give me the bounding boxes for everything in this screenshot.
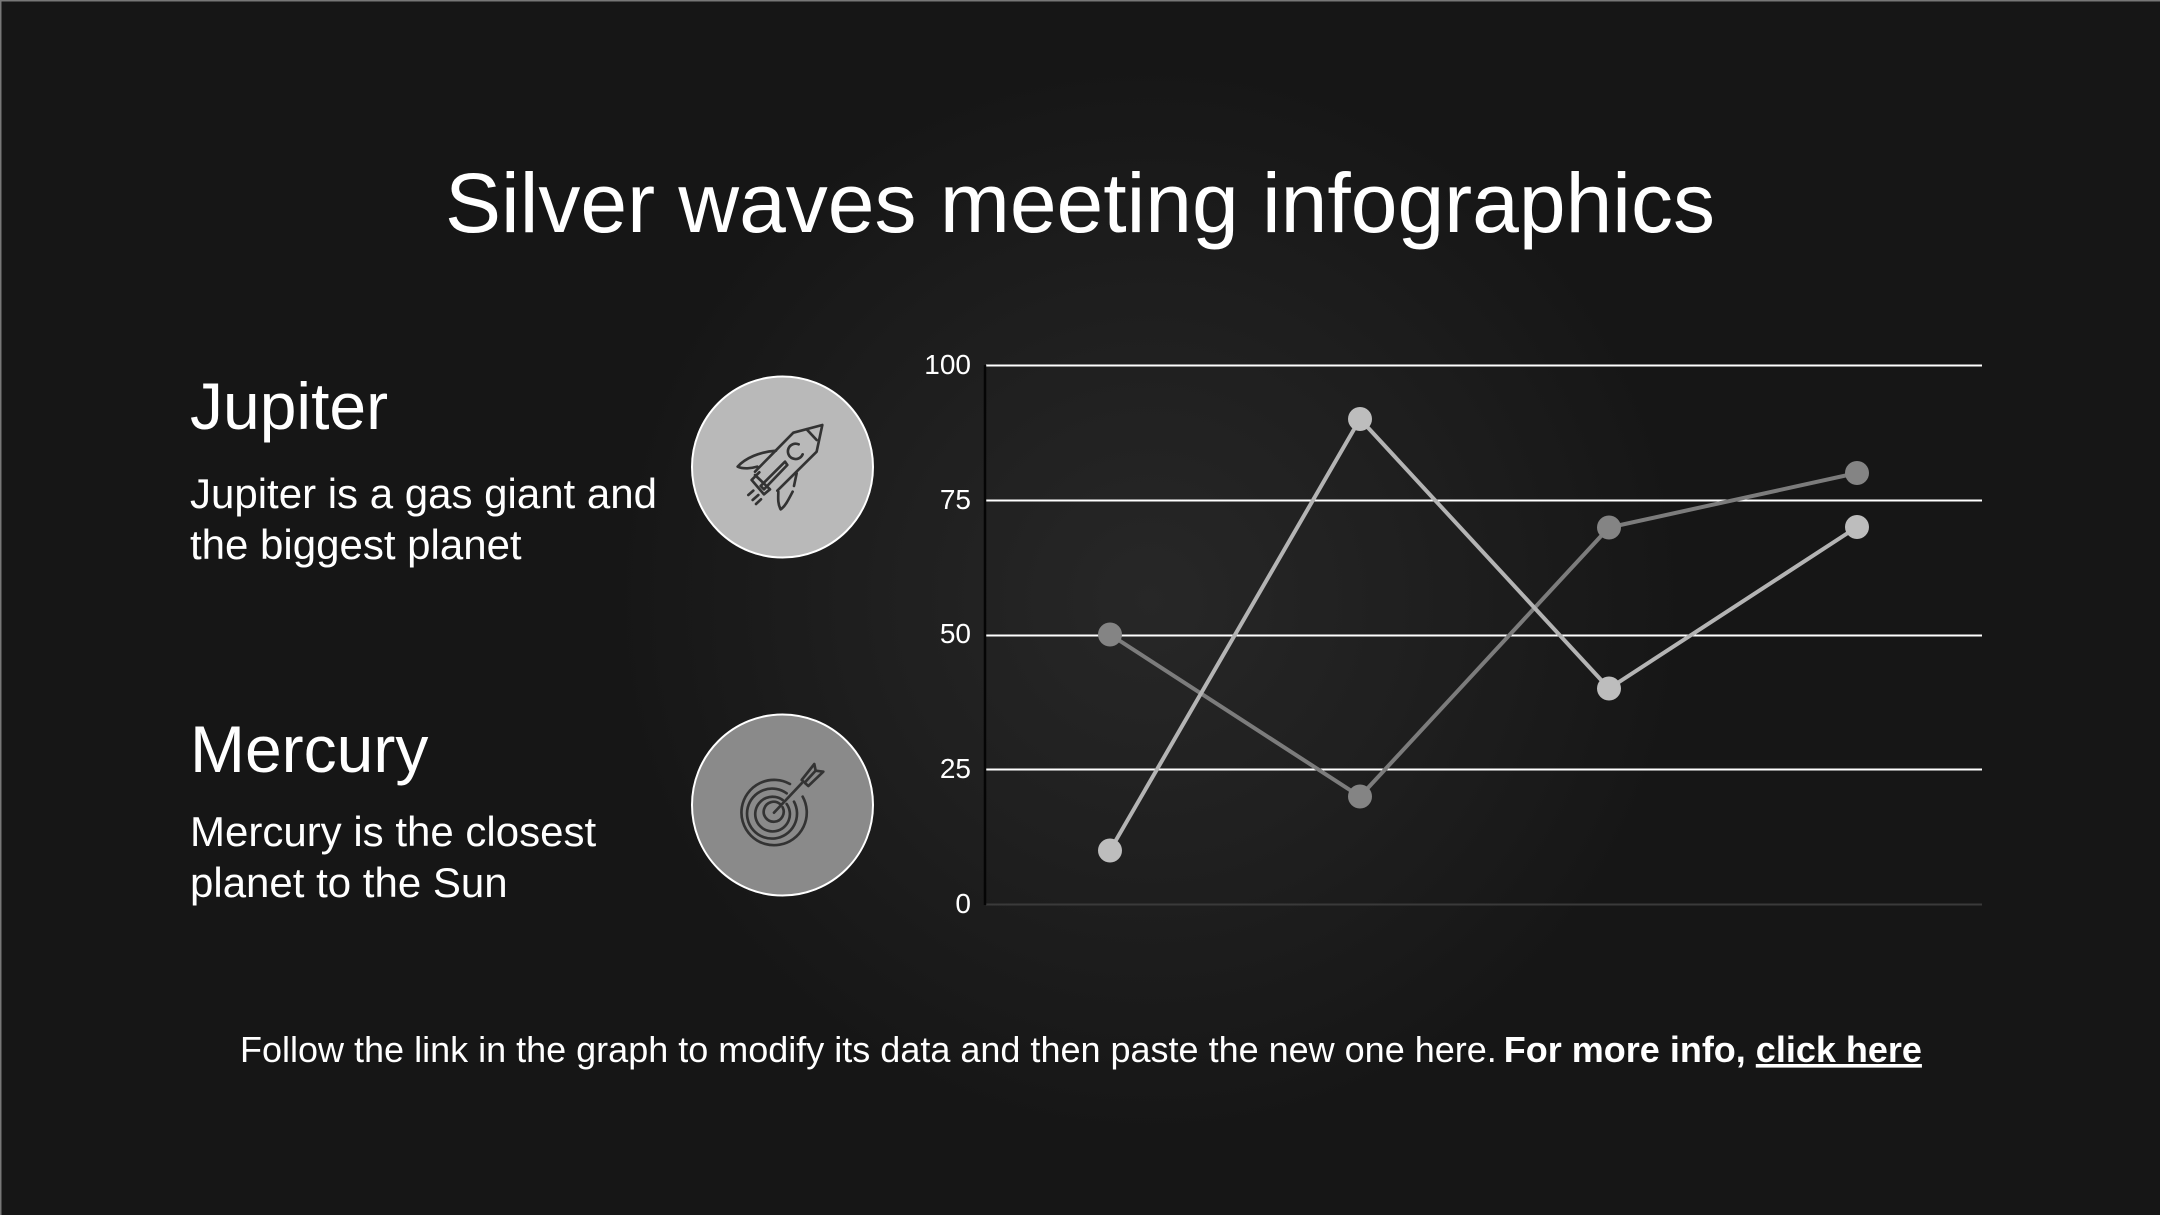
series: dark line [1098,461,1869,808]
icon: rocket in circle [692,376,873,558]
chart gridlines [986,366,1982,904]
line chart [924,349,1982,919]
chart y axis labels: 25 [940,753,971,784]
panel: Jupiter [190,369,873,568]
chart y axis labels: 100 [924,349,971,380]
series: light line [1098,407,1869,862]
heading: Mercury: Mercury [190,712,428,786]
footer note: Follow the link in the graph to modify its data and then paste the new one here.For more info, click here [240,1029,1922,1070]
text block: Mercury description: planet to the Sun [190,859,508,906]
chart y axis labels: 0 [955,888,971,919]
title: Silver waves meeting infographics [445,156,1715,250]
text block: Jupiter description: Jupiter is a gas giant and [190,470,657,517]
text block: Jupiter description: the biggest planet [190,521,522,568]
icon: target in circle [692,714,873,896]
chart y axis labels: 75 [940,484,971,515]
panel: Mercury [190,712,873,906]
text block: Mercury description: Mercury is the closest [190,808,596,855]
chart y axis line [984,365,986,905]
chart y axis labels [924,349,971,919]
heading: Jupiter: Jupiter [190,369,388,443]
chart y axis labels: 50 [940,618,971,649]
